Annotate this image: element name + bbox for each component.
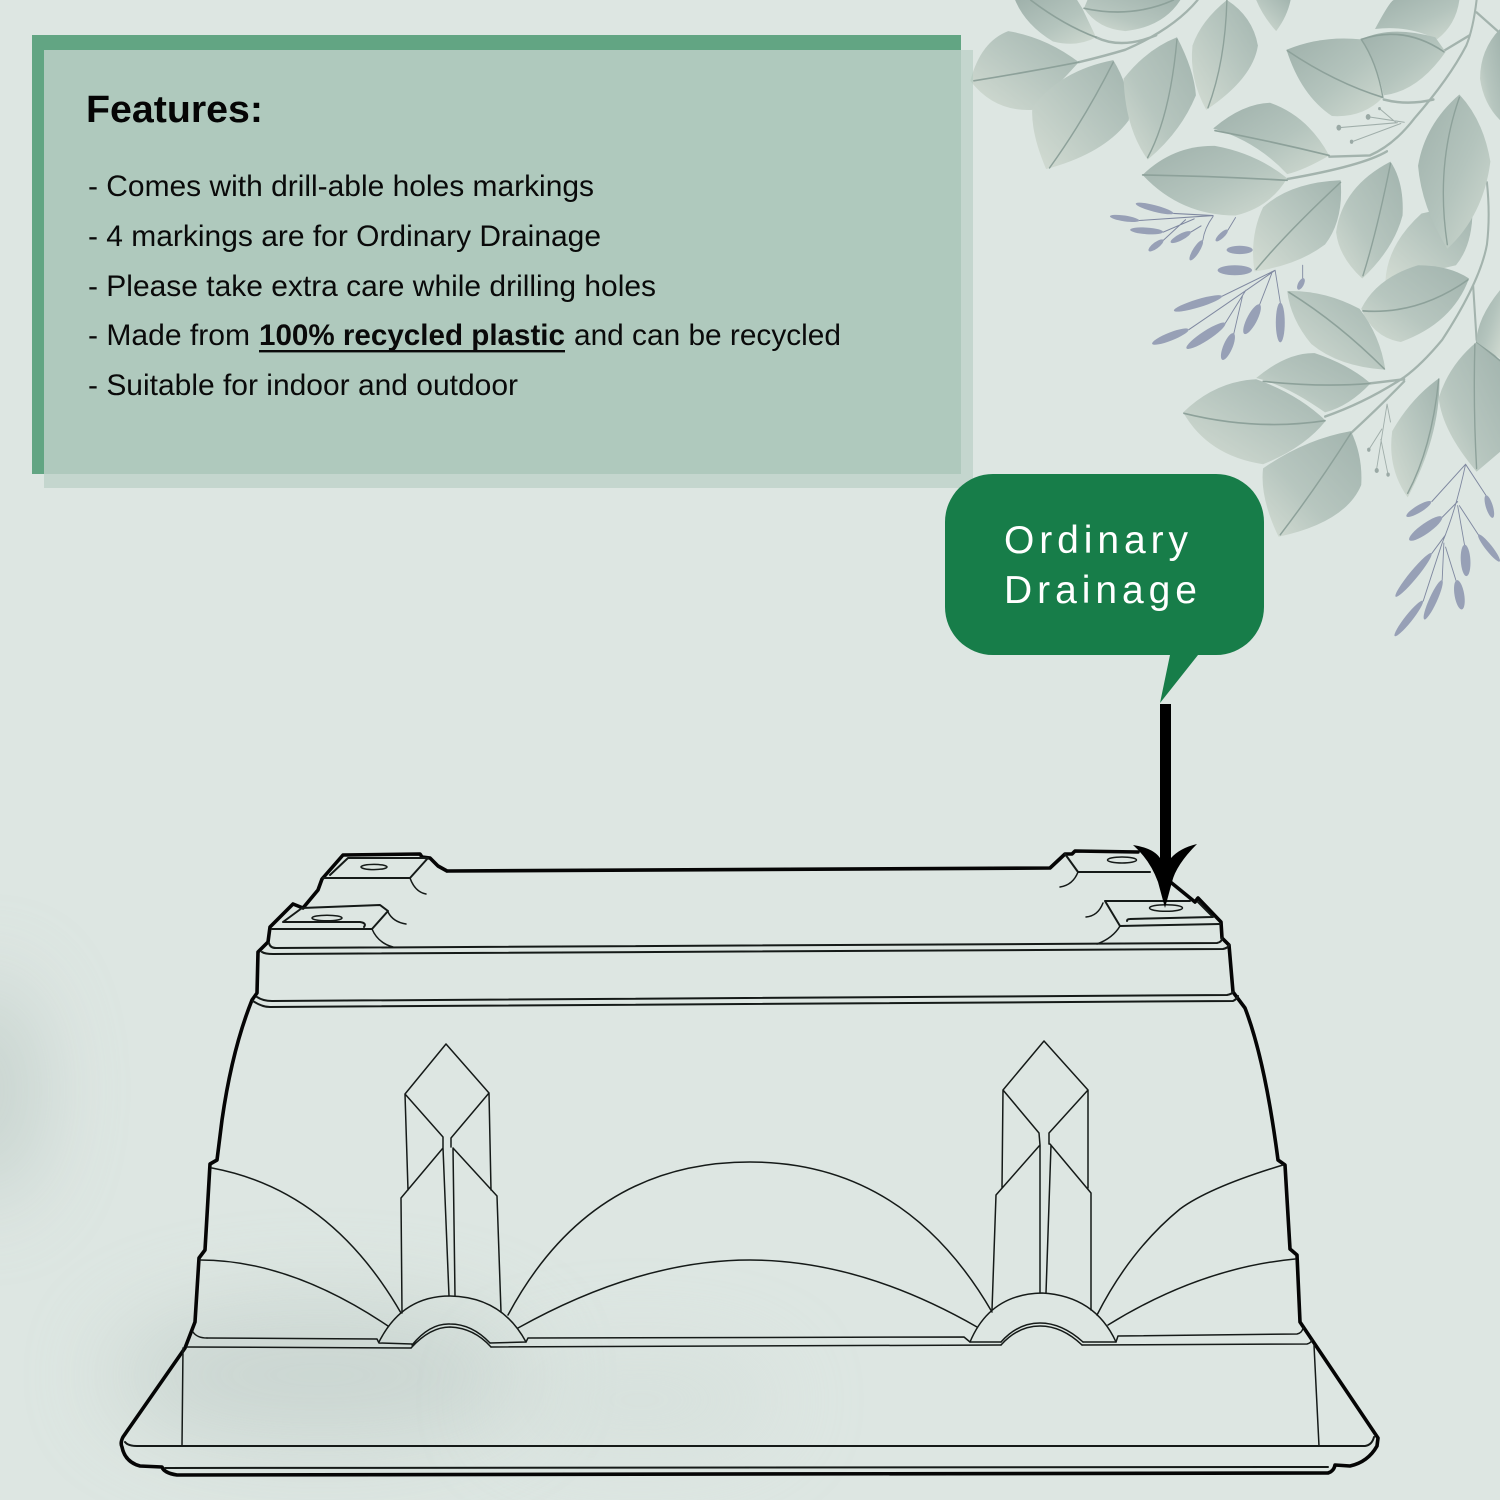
arrow pointing to drainage hole [1133,704,1197,908]
feature list: 100% recycled plastic [259,319,565,352]
feature list: and can be recycled [574,319,841,352]
feature list: - Please take extra care while drilling holes [88,270,656,303]
rim bands [253,938,1238,1007]
decorative arches [200,1162,1295,1328]
right tabs [1060,854,1220,944]
callout: ordinary drainage: Drainage [1004,569,1197,612]
heading: features: Features: [86,89,263,131]
pot line drawing [121,851,1378,1475]
blue sprigs [1110,200,1500,639]
foliage illustration [970,0,1500,639]
feature list [88,170,841,402]
right buttress [970,1041,1312,1345]
callout: ordinary drainage [945,474,1264,703]
callout: ordinary drainage: Ordinary [1004,519,1188,562]
feature list: - Suitable for indoor and outdoor [88,369,518,402]
pot outline [121,851,1378,1475]
base tray lines [125,1332,1374,1468]
feature list: - Comes with drill-able holes markings [88,170,594,203]
leaves [970,0,1500,537]
panel: features [32,35,973,488]
left buttress [187,1044,1001,1348]
feature list: - Made from [88,319,250,352]
left tabs [272,858,428,947]
feature list: - 4 markings are for Ordinary Drainage [88,220,601,253]
